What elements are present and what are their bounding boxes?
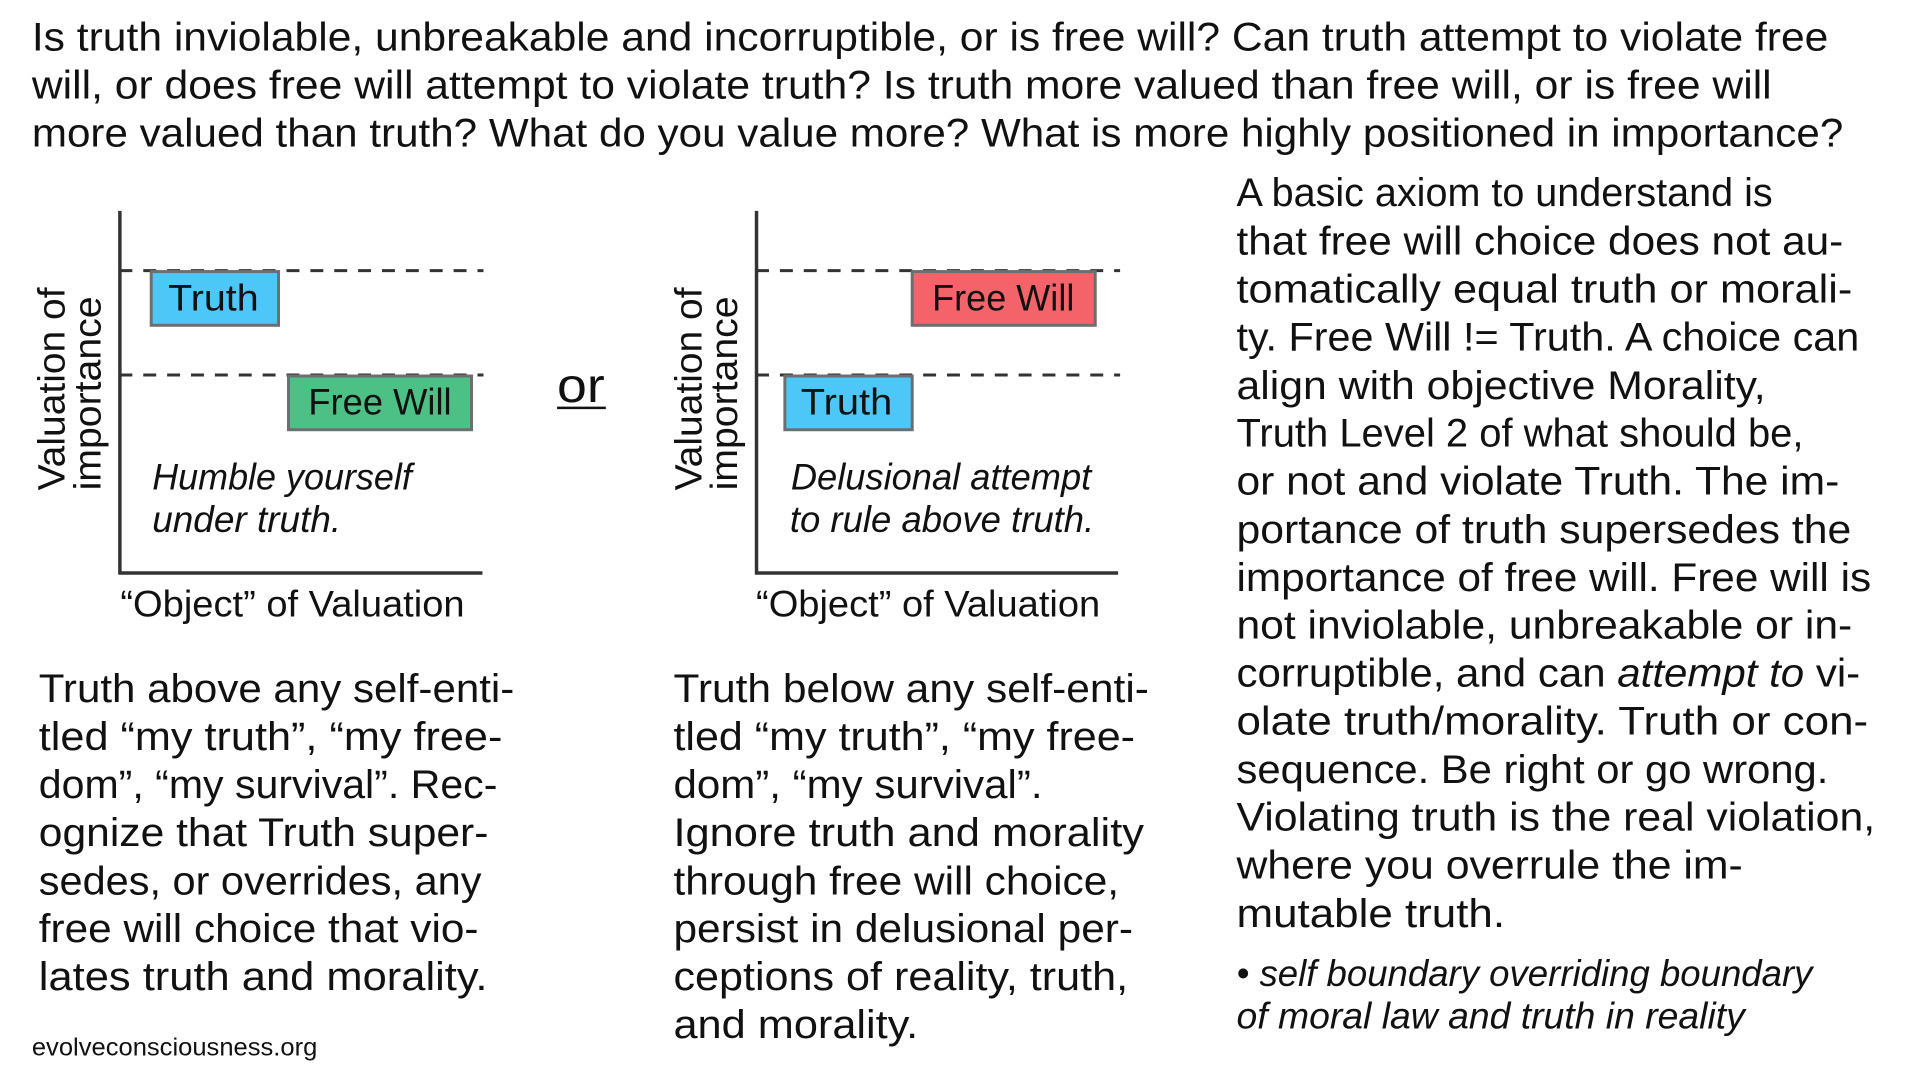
text block: truth above: free will choice that vio- xyxy=(39,906,478,951)
text block: truth above: ognize that Truth super- xyxy=(39,810,488,855)
text block: truth below: Truth below any self-enti- xyxy=(673,666,1149,711)
x axis label: “Object” of Valuation xyxy=(756,584,1100,625)
text block: truth below: and morality. xyxy=(673,1002,918,1047)
text block: basic axiom: ty. Free Will != Truth. A choice can xyxy=(1236,315,1859,360)
box: Free Will: Free Will xyxy=(308,381,452,422)
text block: basic axiom: importance of free will. Free will is xyxy=(1236,555,1871,600)
caption: humble yourself: Humble yourself xyxy=(152,456,416,497)
box: Truth xyxy=(785,376,912,430)
text block: truth below: through free will choice, xyxy=(673,858,1119,903)
source url: evolveconsciousness.org xyxy=(32,1033,317,1061)
text block: basic axiom xyxy=(1235,170,1875,936)
text block: basic axiom: mutable truth. xyxy=(1236,891,1505,936)
note: self boundary xyxy=(1236,953,1815,1037)
text block: truth above: sedes, or overrides, any xyxy=(39,858,482,903)
note: self boundary: of moral law and truth in reality xyxy=(1236,996,1747,1037)
y axis label: importance xyxy=(704,296,746,490)
text block: truth below: tled “my truth”, “my free- xyxy=(673,714,1135,759)
text block: basic axiom: corruptible, and can attempt to vi- xyxy=(1236,650,1860,695)
caption: delusional attempt: Delusional attempt xyxy=(791,456,1093,497)
text block: basic axiom: that free will choice does not au- xyxy=(1236,219,1843,264)
text block: truth above: dom”, “my survival”. Rec- xyxy=(39,762,497,807)
text block: basic axiom: Violating truth is the real violation, xyxy=(1236,795,1875,840)
text block: truth above: lates truth and morality. xyxy=(39,954,487,999)
y axis label xyxy=(32,287,109,490)
x axis label: “Object” of Valuation xyxy=(120,584,465,625)
text block: basic axiom: not inviolable, unbreakable or in- xyxy=(1236,603,1852,648)
text block: truth below: Ignore truth and morality xyxy=(673,810,1145,855)
text block: basic axiom: sequence. Be right or go wrong. xyxy=(1236,747,1828,792)
text block: basic axiom: portance of truth supersedes the xyxy=(1236,507,1851,552)
text block: truth above: tled “my truth”, “my free- xyxy=(39,714,502,759)
text block: basic axiom: Truth Level 2 of what should be, xyxy=(1236,411,1803,456)
y axis label: importance xyxy=(67,296,109,490)
text block: truth below: dom”, “my survival”. xyxy=(673,762,1043,807)
text block: basic axiom: A basic axiom to understand is xyxy=(1236,170,1773,215)
heading: opening questions: Is truth inviolable, unbreakable and incorruptible, or is free will? Can truth attempt to violate free xyxy=(32,15,1828,60)
heading: opening questions: will, or does free will attempt to violate truth? Is truth more valued than free will, or is free will xyxy=(31,62,1772,107)
box: Truth: Truth xyxy=(801,381,892,422)
y axis label: Valuation of xyxy=(32,287,74,490)
text block: truth below: persist in delusional per- xyxy=(673,906,1133,951)
box: Truth xyxy=(151,272,279,325)
box: Free Will xyxy=(912,272,1095,325)
caption: delusional attempt: to rule above truth. xyxy=(790,499,1094,540)
heading: opening questions: more valued than truth? What do you value more? What is more highly positioned in importance? xyxy=(32,111,1843,156)
text block: basic axiom: where you overrule the im- xyxy=(1235,842,1743,887)
heading: opening questions xyxy=(31,15,1843,156)
box: Free Will xyxy=(288,376,472,430)
or divider: or xyxy=(557,360,605,413)
text block: truth below: ceptions of reality, truth, xyxy=(673,954,1128,999)
chart: truth above free will xyxy=(32,211,483,625)
note: self boundary: • self boundary overriding boundary xyxy=(1236,953,1815,994)
text block: basic axiom: align with objective Morality, xyxy=(1236,363,1766,408)
text block: basic axiom: olate truth/morality. Truth or con- xyxy=(1236,699,1868,744)
text block: truth above: Truth above any self-enti- xyxy=(39,666,514,711)
text block: basic axiom: or not and violate Truth. The im- xyxy=(1236,458,1839,503)
caption: humble yourself xyxy=(152,456,416,540)
chart: free will above truth xyxy=(668,211,1120,625)
box: Truth: Truth xyxy=(168,277,259,318)
caption: delusional attempt xyxy=(790,456,1094,540)
text block: truth below xyxy=(673,666,1149,1047)
y axis label xyxy=(668,287,746,490)
text block: truth above xyxy=(39,666,514,999)
y axis label: Valuation of xyxy=(668,287,710,490)
caption: humble yourself: under truth. xyxy=(152,499,341,540)
box: Free Will: Free Will xyxy=(932,277,1074,318)
text block: basic axiom: tomatically equal truth or morali- xyxy=(1236,266,1852,311)
